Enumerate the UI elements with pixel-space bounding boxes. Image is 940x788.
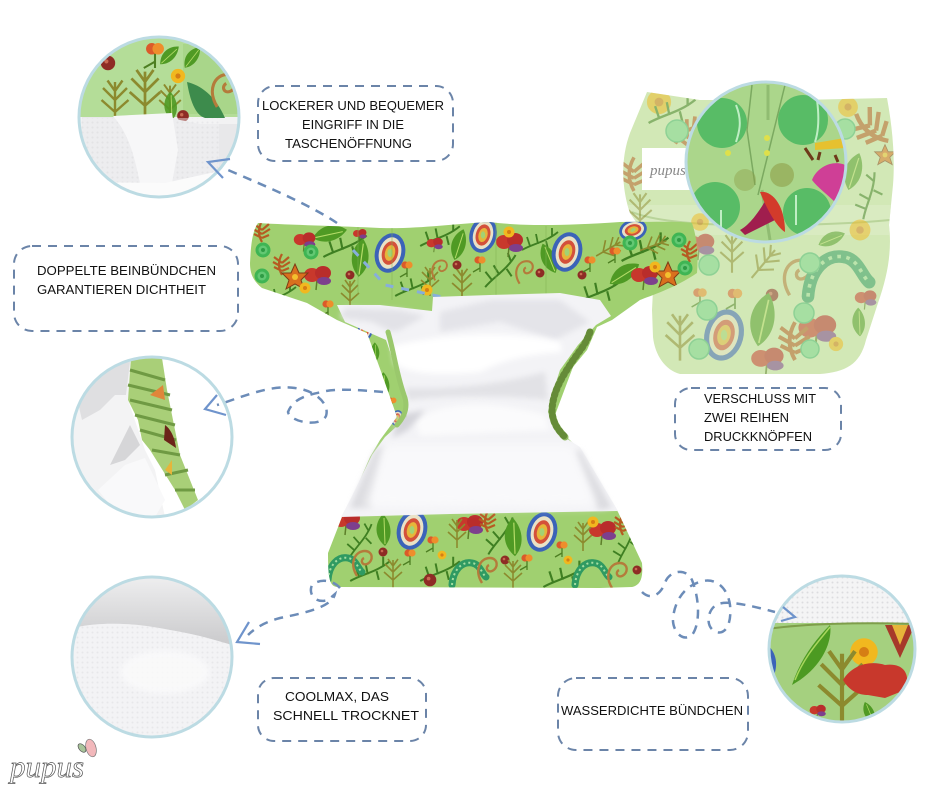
callout: double leg cuffs: DOPPELTE BEINBÜNDCHEN — [37, 263, 216, 278]
circle detail: snap closures — [686, 82, 846, 242]
arrow: to coolmax detail — [237, 581, 340, 644]
logo: pupus — [8, 738, 98, 784]
arrow: to pocket detail — [208, 159, 337, 223]
printed faint arrow crossing the band — [353, 250, 447, 298]
callout: snap closure: ZWEI REIHEN — [704, 410, 789, 425]
callout: coolmax — [258, 678, 426, 741]
callout: pocket opening: EINGRIFF IN DIE — [302, 117, 404, 132]
white inner lining — [337, 293, 618, 517]
callout: double leg cuffs: GARANTIEREN DICHTHEIT — [37, 282, 206, 297]
callout: waterproof cuffs — [558, 678, 748, 750]
circle detail: double leg cuffs — [72, 357, 232, 517]
callout: pocket opening: LOCKERER UND BEQUEMER — [262, 98, 444, 113]
elastic leg cuffs — [388, 332, 590, 437]
logo: pupus: pupus — [8, 749, 84, 784]
lining folds and shading — [340, 300, 612, 510]
main open diaper photo — [250, 222, 698, 588]
circle detail: coolmax fabric — [72, 577, 232, 737]
callout: pocket opening — [258, 86, 453, 161]
callout: coolmax: COOLMAX, DAS — [285, 689, 389, 704]
callout: snap closure: DRUCKKNÖPFEN — [704, 429, 812, 444]
callout: coolmax: SCHNELL TROCKNET — [273, 708, 419, 723]
callout: snap closure — [675, 388, 841, 450]
back view of diaper (faded) — [620, 85, 900, 380]
circle detail: waterproof cuffs — [768, 575, 916, 727]
arrow: to waterproof cuff detail — [642, 572, 795, 637]
callout: waterproof cuffs: WASSERDICHTE BÜNDCHEN — [561, 703, 743, 718]
callout: double leg cuffs — [14, 246, 238, 331]
arrow: to leg cuff detail — [205, 387, 383, 423]
circle detail: pocket opening — [79, 37, 239, 200]
back view of diaper (faded): pupus — [649, 163, 686, 179]
callout: snap closure: VERSCHLUSS MIT — [704, 391, 816, 406]
callout: pocket opening: TASCHENÖFFNUNG — [285, 136, 412, 151]
